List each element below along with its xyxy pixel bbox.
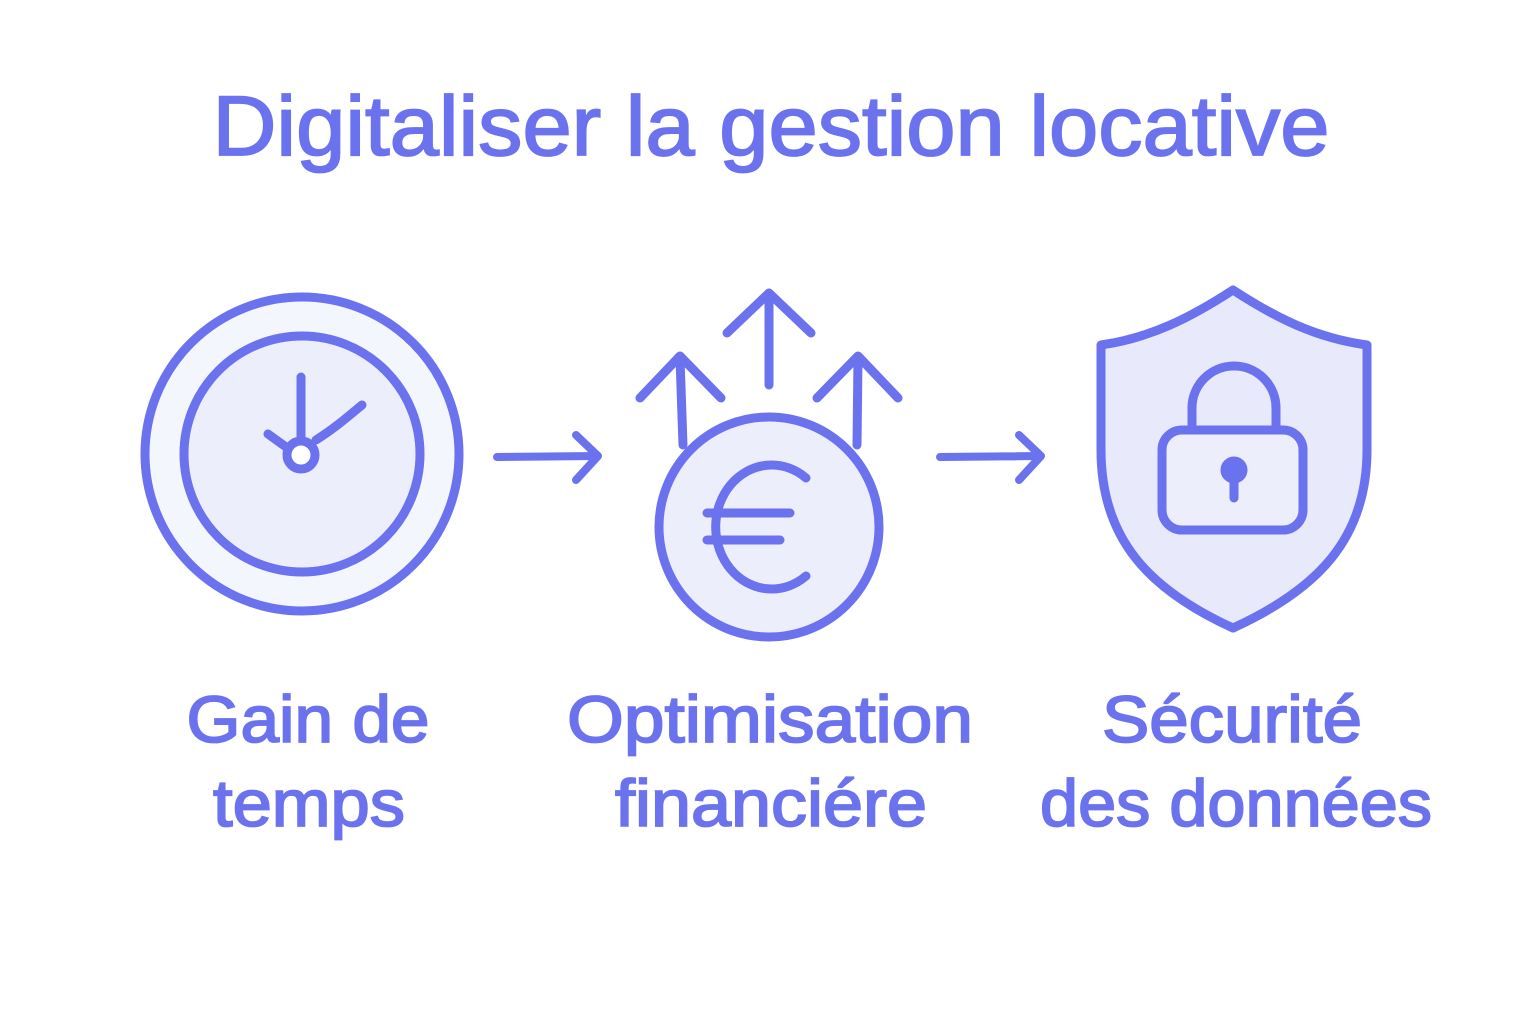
title: Digitaliser la gestion locative <box>212 79 1330 173</box>
label: optimisation financiere: financiére <box>615 766 927 840</box>
arrow 2 <box>940 435 1041 480</box>
label: securite des donnees: des données <box>1040 766 1432 840</box>
icon: euro coin with up arrows <box>640 293 898 637</box>
label: gain de temps: Gain de <box>186 682 430 756</box>
label: gain de temps: temps <box>213 766 405 840</box>
label: optimisation financiere: Optimisation <box>567 682 973 756</box>
arrow 1 <box>497 435 598 480</box>
label: gain de temps <box>186 682 430 840</box>
label: optimisation financiere <box>567 682 973 840</box>
icon: shield with lock <box>1101 290 1367 628</box>
label: securite des donnees: Sécurité <box>1102 682 1362 756</box>
label: securite des donnees <box>1040 682 1432 840</box>
icon: clock <box>145 297 459 611</box>
